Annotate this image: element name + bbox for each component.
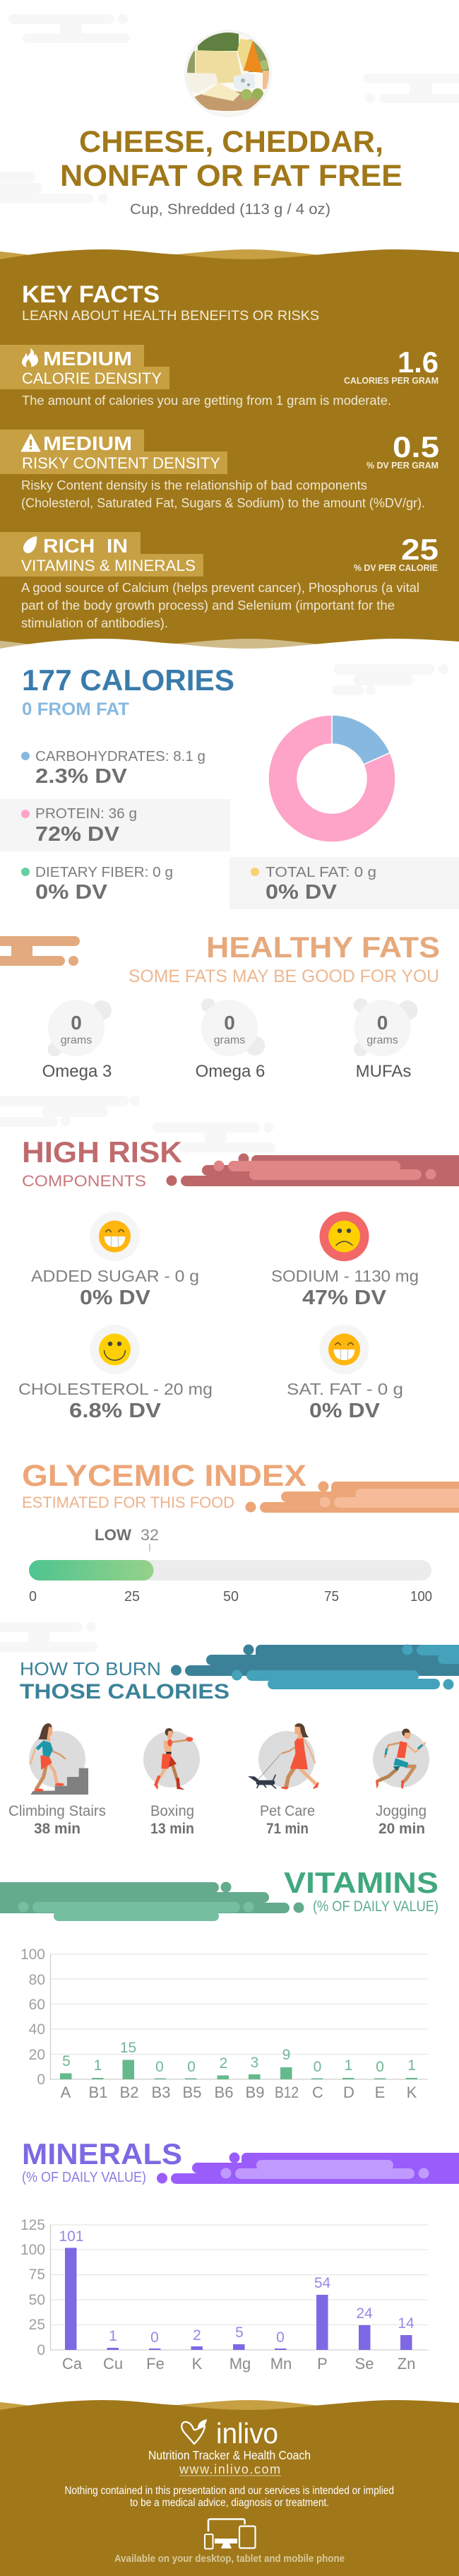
bar chart: vitamins: B6 xyxy=(215,2084,233,2101)
item: cholesterol: 6.8% DV xyxy=(69,1400,162,1422)
bar chart: vitamins: 9 xyxy=(282,2047,290,2063)
bar chart: minerals: Mg xyxy=(230,2355,251,2373)
disclaimer: to be a medical advice, diagnosis or treatment. xyxy=(130,2497,329,2509)
bar chart: minerals: 101 xyxy=(59,2228,84,2245)
bar chart: minerals: 2 xyxy=(193,2327,201,2344)
fact: rich in vitamins and minerals: 25 xyxy=(401,533,439,566)
decorative blob: orange xyxy=(246,1481,459,1513)
item: omega 3 xyxy=(42,1000,112,1081)
legend: carbohydrates: 2.3% DV xyxy=(35,765,128,788)
bar chart: vitamins: 1 xyxy=(345,2057,352,2074)
availability note: Available on your desktop, tablet and mobile phone xyxy=(114,2553,345,2565)
bar chart: vitamins: 0 xyxy=(187,2059,196,2075)
gauge scale xyxy=(29,1589,432,1605)
fact: risky content density: MEDIUM xyxy=(43,432,132,454)
icon: devices xyxy=(205,2519,256,2549)
activity: jogging: 20 min xyxy=(378,1821,425,1837)
activity: jogging xyxy=(373,1729,429,1837)
heading: healthy fats: HEALTHY FATS xyxy=(206,930,440,964)
icon: grinning face xyxy=(99,1221,131,1252)
activity: pet care: Pet Care xyxy=(260,1803,315,1819)
legend: dietary fiber: DIETARY FIBER: 0 g xyxy=(35,865,173,880)
heading: vitamins: VITAMINS xyxy=(284,1866,439,1899)
legend: protein xyxy=(0,799,230,851)
bar chart: vitamins: A xyxy=(61,2084,71,2101)
bar chart: minerals: 125 xyxy=(20,2217,45,2233)
serving size subtitle: Cup, Shredded (113 g / 4 oz) xyxy=(130,201,330,218)
fact: risky content density: % DV PER GRAM xyxy=(366,460,439,471)
subheading: vitamins: (% OF DAILY VALUE) xyxy=(313,1898,439,1915)
title: CHEESE, CHEDDAR, xyxy=(79,125,383,159)
gauge label xyxy=(95,1526,159,1552)
fact: calorie density: CALORIES PER GRAM xyxy=(344,375,439,386)
item: saturated fat xyxy=(287,1325,403,1422)
item: sodium: 47% DV xyxy=(302,1287,387,1309)
legend: carbohydrates: CARBOHYDRATES: 8.1 g xyxy=(35,749,205,764)
icon: dog walking figure xyxy=(248,1723,318,1789)
item: added sugar: ADDED SUGAR - 0 g xyxy=(31,1267,199,1285)
gauge scale: 75 xyxy=(324,1589,339,1605)
title xyxy=(60,125,403,193)
bar chart: minerals: 1 xyxy=(109,2328,117,2344)
icon: flame xyxy=(22,348,38,367)
bar chart: vitamins: 80 xyxy=(29,1972,45,1988)
legend: protein: PROTEIN: 36 g xyxy=(35,806,137,822)
bar chart: vitamins: B2 xyxy=(120,2084,138,2101)
item: added sugar: 0% DV xyxy=(80,1287,151,1309)
donut chart xyxy=(268,715,395,842)
bar chart: vitamins: 2 xyxy=(220,2055,227,2072)
bar chart: minerals: Mn xyxy=(270,2355,292,2373)
item: MUFAs: MUFAs xyxy=(356,1062,411,1081)
panel: calories xyxy=(0,663,459,909)
heading: minerals: MINERALS xyxy=(22,2137,182,2170)
item: saturated fat: SAT. FAT - 0 g xyxy=(287,1380,403,1398)
bar chart: minerals: Ca xyxy=(62,2355,83,2373)
subheading: minerals: (% OF DAILY VALUE) xyxy=(22,2170,146,2185)
fact: rich in vitamins and minerals: % DV PER CALORIE xyxy=(354,562,438,573)
subheading: from fat: 0 FROM FAT xyxy=(22,699,129,719)
bar chart: minerals: 0 xyxy=(276,2329,285,2346)
activity: pet care: 71 min xyxy=(266,1821,309,1837)
subheading: components: COMPONENTS xyxy=(22,1172,146,1190)
bar chart: minerals: 75 xyxy=(29,2267,45,2283)
bar chart: vitamins xyxy=(20,1946,428,2101)
panel: key facts xyxy=(0,249,459,661)
gauge label: LOW xyxy=(95,1526,131,1544)
item: added sugar xyxy=(31,1212,199,1309)
gauge scale: 0 xyxy=(29,1589,37,1605)
item: omega 6: 0 xyxy=(224,1012,235,1034)
heading: high risk: HIGH RISK xyxy=(22,1135,182,1169)
gauge scale: 50 xyxy=(223,1589,239,1605)
bar chart: minerals: Zn xyxy=(398,2355,415,2373)
panel: vitamins xyxy=(0,1866,439,2101)
bar chart: vitamins: 15 xyxy=(120,2040,136,2056)
website link: www.inlivo.com xyxy=(179,2462,280,2476)
heading: calories: 177 CALORIES xyxy=(22,663,234,697)
item: omega 3: 0 xyxy=(71,1012,82,1034)
bar chart: vitamins: E xyxy=(375,2084,385,2101)
bar chart: vitamins: B12 xyxy=(275,2084,299,2101)
fact: rich in vitamins and minerals: RICH IN xyxy=(43,535,128,557)
bar chart: minerals: 100 xyxy=(20,2242,45,2258)
decorative blob: green xyxy=(0,1882,304,1921)
icon: warning triangle xyxy=(21,434,40,451)
decorative blob: red xyxy=(167,1153,459,1186)
bar chart: vitamins: B3 xyxy=(152,2084,170,2101)
icon: climbing stairs figure xyxy=(29,1723,88,1795)
icon: boxing figure xyxy=(143,1728,200,1790)
legend: total fat: TOTAL FAT: 0 g xyxy=(266,865,376,880)
panel: minerals xyxy=(20,2137,459,2373)
bar chart: vitamins: 20 xyxy=(29,2047,45,2063)
bar chart: minerals: 0 xyxy=(37,2342,45,2358)
item: cholesterol xyxy=(18,1325,213,1422)
bar chart: minerals: 25 xyxy=(29,2317,45,2333)
disclaimer xyxy=(65,2485,394,2509)
panel: glycemic index xyxy=(22,1459,459,1605)
title: NONFAT OR FAT FREE xyxy=(60,159,403,193)
bar chart: minerals: K xyxy=(192,2355,203,2373)
fact: calorie density: The amount of calories you are getting from 1 gram is moderate. xyxy=(22,394,391,408)
item: MUFAs xyxy=(354,998,418,1081)
legend: dietary fiber: 0% DV xyxy=(35,881,108,904)
fact: rich in vitamins and minerals xyxy=(0,532,439,630)
activity: climbing stairs: Climbing Stairs xyxy=(8,1803,106,1819)
fact: calorie density: CALORIE DENSITY xyxy=(22,370,162,387)
subheading: key facts: LEARN ABOUT HEALTH BENEFITS OR RISKS xyxy=(22,308,319,324)
bar chart: vitamins: B1 xyxy=(89,2084,107,2101)
bar chart: vitamins: B5 xyxy=(183,2084,201,2101)
bar chart: minerals: 54 xyxy=(314,2275,330,2291)
decorative blob: teal xyxy=(171,1645,459,1690)
item: omega 6: Omega 6 xyxy=(196,1062,265,1081)
icon: sad face xyxy=(328,1221,360,1252)
fact: risky content density: RISKY CONTENT DENSITY xyxy=(22,454,220,472)
logo: inlivo: inlivo xyxy=(216,2417,278,2450)
bar chart: minerals: 14 xyxy=(398,2315,415,2332)
activity: boxing xyxy=(143,1728,200,1837)
bar chart: vitamins: D xyxy=(343,2084,354,2101)
gauge label: 32 xyxy=(141,1526,159,1544)
legend: dietary fiber xyxy=(21,865,173,904)
disclaimer: Nothing contained in this presentation and our services is intended or implied xyxy=(65,2485,394,2497)
item: MUFAs: grams xyxy=(366,1034,398,1046)
activity: climbing stairs xyxy=(8,1723,106,1837)
bar chart: vitamins: 0 xyxy=(314,2059,321,2075)
gauge scale: 100 xyxy=(410,1589,432,1605)
bar chart: vitamins: 5 xyxy=(62,2053,71,2069)
bar chart: minerals: 50 xyxy=(29,2292,45,2308)
fact: risky content density: (Cholesterol, Saturated Fat, Sugars & Sodium) to the amount (%DV/gr). xyxy=(21,496,425,510)
bar chart: vitamins: C xyxy=(312,2084,323,2101)
gauge scale: 25 xyxy=(124,1589,140,1605)
item: omega 3: grams xyxy=(61,1034,92,1046)
activity: boxing: 13 min xyxy=(150,1821,194,1837)
icon: smiling face xyxy=(99,1334,131,1365)
fact: rich in vitamins and minerals: VITAMINS & MINERALS xyxy=(21,557,196,574)
decorative blob: purple xyxy=(157,2152,459,2184)
bar chart: vitamins: 1 xyxy=(407,2057,416,2074)
bar chart: minerals: 24 xyxy=(356,2305,373,2322)
fact: rich in vitamins and minerals: A good source of Calcium (helps prevent cancer), Phosphorus (a vital xyxy=(21,581,419,595)
fact: rich in vitamins and minerals: part of the body growth process) and Selenium (important for the xyxy=(21,598,395,613)
bar chart: vitamins: 0 xyxy=(155,2059,164,2075)
bar chart: minerals: Cu xyxy=(103,2355,123,2373)
subheading: healthy fats: SOME FATS MAY BE GOOD FOR YOU xyxy=(129,967,439,986)
fact: calorie density: MEDIUM xyxy=(43,348,132,370)
fact: rich in vitamins and minerals: stimulation of antibodies). xyxy=(21,616,168,630)
panel: how to burn those calories xyxy=(8,1645,459,1837)
item: omega 3: Omega 3 xyxy=(42,1062,112,1081)
bar chart: minerals: P xyxy=(317,2355,328,2373)
heading: glycemic index: GLYCEMIC INDEX xyxy=(22,1459,306,1493)
legend: total fat xyxy=(230,857,459,909)
bar chart: vitamins: 60 xyxy=(29,1997,45,2013)
bar chart: vitamins: 1 xyxy=(94,2057,102,2074)
panel: high risk xyxy=(18,1135,459,1422)
bar chart: vitamins: 40 xyxy=(29,2021,45,2038)
fact: calorie density: 1.6 xyxy=(398,345,439,379)
tagline: Nutrition Tracker & Health Coach xyxy=(148,2448,311,2462)
heading: key facts: KEY FACTS xyxy=(22,281,160,308)
item: cholesterol: CHOLESTEROL - 20 mg xyxy=(18,1380,213,1398)
panel: healthy fats xyxy=(0,930,440,1081)
fact: calorie density xyxy=(0,345,439,408)
item: saturated fat: 0% DV xyxy=(309,1400,381,1422)
icon: food photo xyxy=(184,28,273,120)
bar chart: vitamins: 0 xyxy=(376,2059,384,2075)
item: sodium: SODIUM - 1130 mg xyxy=(271,1267,419,1285)
item: omega 6 xyxy=(196,998,265,1081)
bar chart: vitamins: 100 xyxy=(20,1946,45,1963)
bar chart: minerals: Se xyxy=(355,2355,374,2373)
bar chart: minerals xyxy=(20,2217,428,2373)
legend: total fat: 0% DV xyxy=(266,881,338,904)
panel: footer xyxy=(0,2400,459,2576)
legend: protein: 72% DV xyxy=(35,823,120,846)
heading: how to burn: HOW TO BURN xyxy=(20,1658,161,1679)
activity: climbing stairs: 38 min xyxy=(34,1821,81,1837)
gauge bar xyxy=(29,1560,431,1581)
fact: risky content density xyxy=(0,430,439,510)
fact: risky content density: 0.5 xyxy=(393,430,439,463)
logo: inlivo xyxy=(181,2417,278,2450)
bar chart: minerals: 5 xyxy=(235,2324,244,2341)
bar chart: minerals: 0 xyxy=(150,2329,159,2346)
activity: boxing: Boxing xyxy=(150,1803,194,1819)
item: sodium xyxy=(271,1212,419,1309)
icon: grinning face xyxy=(328,1334,360,1365)
subheading: glycemic index: ESTIMATED FOR THIS FOOD xyxy=(22,1494,234,1511)
activity: jogging: Jogging xyxy=(376,1803,427,1819)
bar chart: vitamins: B9 xyxy=(246,2084,264,2101)
legend: carbohydrates xyxy=(21,749,205,788)
item: omega 6: grams xyxy=(214,1034,245,1046)
item: MUFAs: 0 xyxy=(377,1012,388,1034)
bar chart: vitamins: 0 xyxy=(37,2072,45,2088)
icon: leaf xyxy=(23,536,37,553)
bar chart: vitamins: K xyxy=(407,2084,417,2101)
decorative blob: orange xyxy=(0,936,80,966)
icon: jogging figure xyxy=(373,1729,429,1789)
activity: pet care xyxy=(248,1723,318,1837)
bar chart: minerals: Fe xyxy=(146,2355,165,2373)
fact: risky content density: Risky Content density is the relationship of bad components xyxy=(21,478,367,492)
bar chart: vitamins: 3 xyxy=(251,2055,258,2071)
heading: those calories: THOSE CALORIES xyxy=(20,1680,230,1703)
